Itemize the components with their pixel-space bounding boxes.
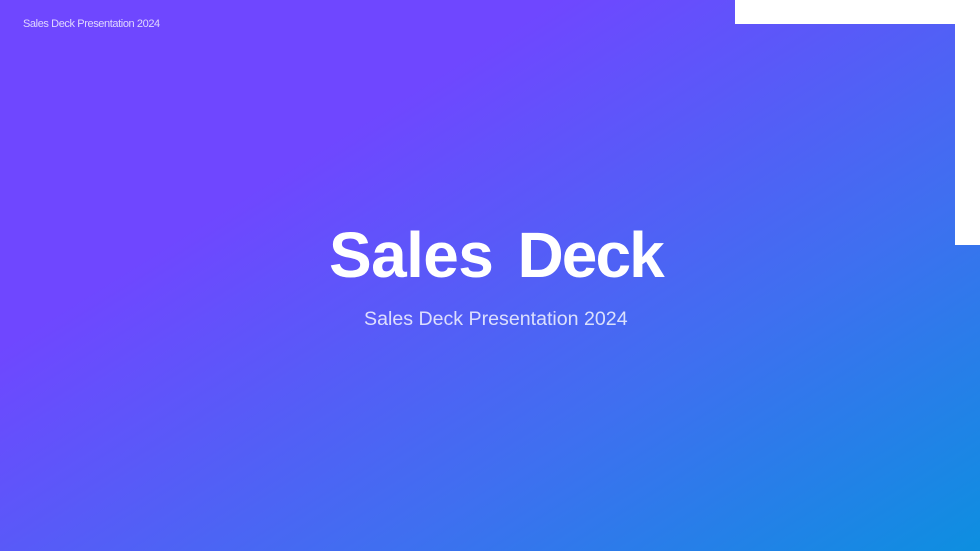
white side block (955, 0, 980, 245)
header label: Sales Deck Presentation 2024 (23, 18, 160, 30)
white corner block (735, 0, 980, 24)
subtitle: Sales Deck Presentation 2024 (364, 308, 628, 330)
title: Sales Deck (329, 219, 663, 291)
